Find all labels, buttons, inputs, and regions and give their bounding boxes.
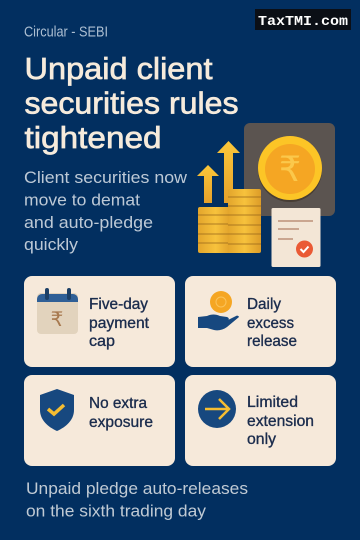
label: only [247, 431, 276, 448]
label [247, 394, 314, 448]
label [247, 296, 297, 350]
label: No extra [89, 395, 147, 412]
icon: rupee coin: ₹ [279, 150, 301, 190]
title: Unpaid client [24, 51, 213, 86]
label: Five-day [89, 296, 148, 313]
subtitle: Client securities now [24, 168, 188, 187]
coin stack: right [228, 189, 261, 253]
label: extension [247, 413, 314, 430]
footer note [26, 479, 248, 520]
subtitle: move to demat [24, 190, 140, 210]
footer note: Unpaid pledge auto-releases [26, 479, 248, 498]
label: exposure [89, 414, 153, 431]
icon: calendar [37, 288, 78, 334]
label: payment [89, 315, 150, 332]
panel: no extra exposure [24, 375, 175, 466]
title: tightened [24, 120, 162, 155]
title: securities rules [24, 86, 238, 120]
subtitle [24, 168, 188, 254]
coin stack: left [198, 207, 233, 253]
panel: daily excess release [185, 276, 336, 367]
icon: rupee coin [258, 136, 322, 202]
label: excess [247, 315, 294, 332]
label [89, 395, 153, 431]
icon: arrow in circle [198, 390, 236, 428]
title [24, 51, 238, 155]
document with check [272, 208, 320, 267]
badge: TaxTMI.com [255, 9, 351, 30]
icon: shield with check [40, 389, 74, 431]
subtitle: quickly [24, 235, 79, 254]
badge: TaxTMI.com: TaxTMI.com [258, 14, 348, 30]
footer note: on the sixth trading day [26, 502, 207, 520]
panel: limited extension only [185, 375, 336, 466]
label: cap [89, 333, 115, 350]
label [89, 296, 150, 350]
label: Limited [247, 394, 298, 411]
subtitle: and auto-pledge [24, 213, 153, 232]
arrow: short [197, 165, 219, 203]
illustration: rupee coin, arrows, coin stacks and document [197, 123, 335, 267]
icon: hand with coin [198, 291, 239, 330]
icon: calendar: ₹ [51, 307, 63, 331]
panel: five-day payment cap [24, 276, 175, 367]
label: release [247, 333, 297, 350]
arrow: tall [217, 141, 240, 203]
label: Daily [247, 296, 281, 313]
category label: Circular - SEBI [24, 24, 108, 40]
panel behind coin [244, 123, 335, 216]
